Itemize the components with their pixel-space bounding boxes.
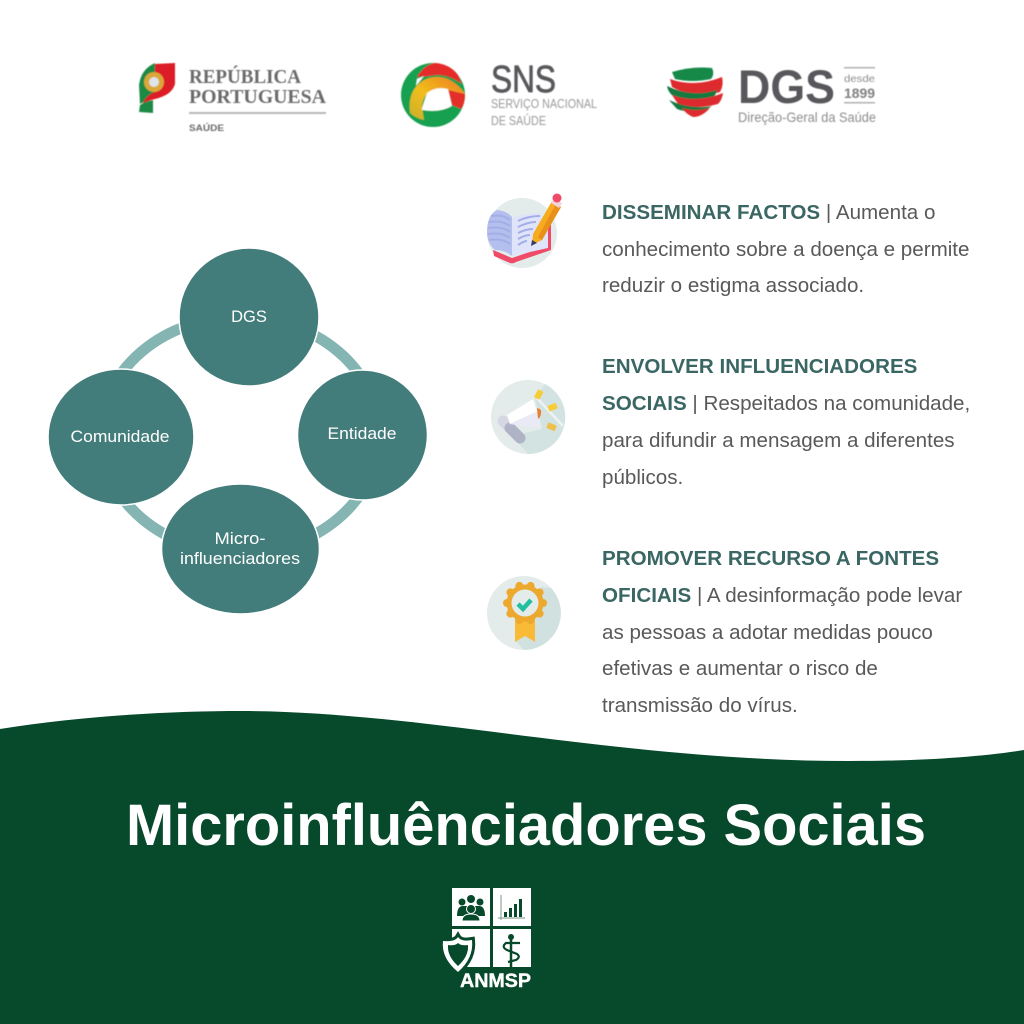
logo: ANMSP: ANMSP [460,971,531,992]
node: Comunidade: Comunidade [70,428,170,446]
text block: envolver influenciadores: SOCIAIS | Respeitados na comunidade, [602,392,970,415]
node: DGS: DGS [231,308,267,326]
logo: República Portuguesa: SAÚDE [189,122,224,133]
logo: DGS [667,60,876,125]
logo: República Portuguesa: PORTUGUESA [189,86,327,108]
text block: disseminar factos: conhecimento sobre a doença e permite [602,238,969,261]
node: DGS [179,248,319,386]
logo: República Portuguesa [139,63,327,133]
icon: award ribbon [487,576,561,650]
text block: promover recurso [602,547,962,717]
logo: DGS: DGS [738,60,835,113]
node: Entidade: Entidade [328,425,396,443]
text block: envolver influenciadores: ENVOLVER INFLUENCIADORES [602,355,917,378]
node: Comunidade [48,369,194,505]
logo: SNS: SERVIÇO NACIONAL [491,96,597,111]
text block: promover recurso: efetivas e aumentar o risco de [602,657,878,680]
icon: book and pencil [487,194,562,268]
node: Micro-influenciadores [162,484,320,614]
text block: promover recurso: PROMOVER RECURSO A FONTES [602,547,939,570]
text block: disseminar factos [602,201,969,297]
logo: República Portuguesa: REPÚBLICA [189,64,302,88]
text block: envolver influenciadores: públicos. [602,466,683,489]
text block: envolver influenciadores [602,355,970,489]
text block: promover recurso: OFICIAIS | A desinformação pode levar [602,584,962,607]
node: Micro-influenciadores: influenciadores [180,550,300,568]
cycle diagram [48,248,428,614]
text block: envolver influenciadores: para difundir a mensagem a diferentes [602,429,955,452]
text block: promover recurso: as pessoas a adotar medidas pouco [602,621,933,644]
logo: SNS: SNS [491,59,556,101]
icon: megaphone [491,380,565,454]
text block: disseminar factos: reduzir o estigma associado. [602,274,864,297]
logo: SNS [401,59,597,128]
logo: DGS: Direção-Geral da Saúde [738,109,876,125]
logo: SNS: DE SAÚDE [491,113,546,128]
footer wave band [0,711,1024,1024]
node: Entidade [298,370,428,500]
logo: ANMSP [443,888,535,992]
title: Microinfluênciadores Sociais [126,793,926,858]
logo: DGS: desde [844,73,875,85]
text block: disseminar factos: DISSEMINAR FACTOS | Aumenta o [602,201,935,224]
logo: DGS: 1899 [844,85,875,101]
text block: promover recurso: transmissão do vírus. [602,694,798,717]
node: Micro-influenciadores: Micro- [214,530,266,548]
